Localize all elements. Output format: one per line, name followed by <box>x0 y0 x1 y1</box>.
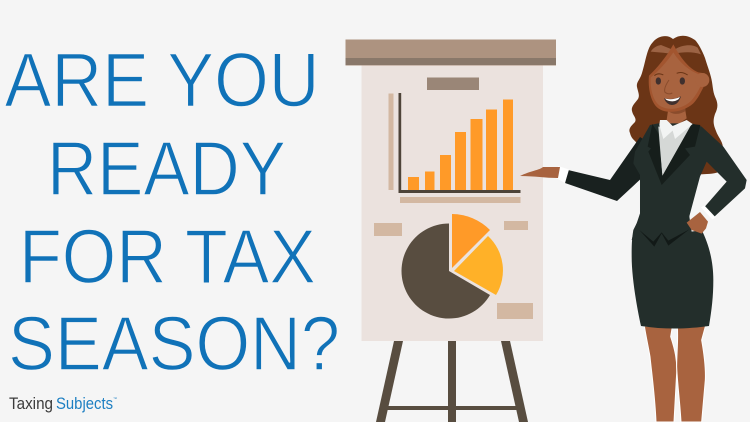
ear <box>695 73 709 87</box>
jacket torso and right sleeve <box>632 120 747 240</box>
pie chart <box>402 214 503 318</box>
pointing hand <box>520 167 560 178</box>
hair <box>629 36 724 175</box>
hand on hip <box>687 212 708 234</box>
waist seam <box>639 229 689 247</box>
logo: Taxing Subjects <box>9 394 117 413</box>
presenter woman <box>520 36 747 422</box>
logo: Taxing Subjects: ™ <box>113 396 117 401</box>
lapels <box>648 124 700 185</box>
mouth <box>664 96 681 105</box>
title: ARE YOU <box>4 38 320 124</box>
pie chart labels <box>374 221 533 319</box>
head <box>649 44 709 128</box>
skirt <box>632 210 713 329</box>
brows <box>654 72 688 76</box>
chart title placeholder <box>427 78 479 90</box>
title: READY <box>47 126 286 212</box>
easel presentation board <box>346 40 556 422</box>
collar <box>659 120 693 139</box>
eyes <box>656 77 661 85</box>
hair highlight <box>651 45 701 54</box>
face <box>649 44 705 112</box>
logo: Taxing Subjects: Subjects <box>56 394 113 413</box>
bar chart <box>388 93 520 203</box>
jacket left sleeve <box>565 137 660 201</box>
paper sheet <box>362 65 543 341</box>
cuff <box>701 205 716 219</box>
shirt <box>658 125 692 176</box>
legs <box>644 325 706 422</box>
title: FOR TAX <box>19 214 316 300</box>
jacket cuff <box>556 166 569 183</box>
neck <box>667 108 687 128</box>
nose <box>665 80 672 94</box>
board top bar <box>346 40 556 66</box>
title <box>4 38 340 387</box>
logo: Taxing Subjects: Taxing <box>9 394 53 413</box>
title: SEASON? <box>8 301 340 387</box>
easel legs <box>376 341 528 422</box>
